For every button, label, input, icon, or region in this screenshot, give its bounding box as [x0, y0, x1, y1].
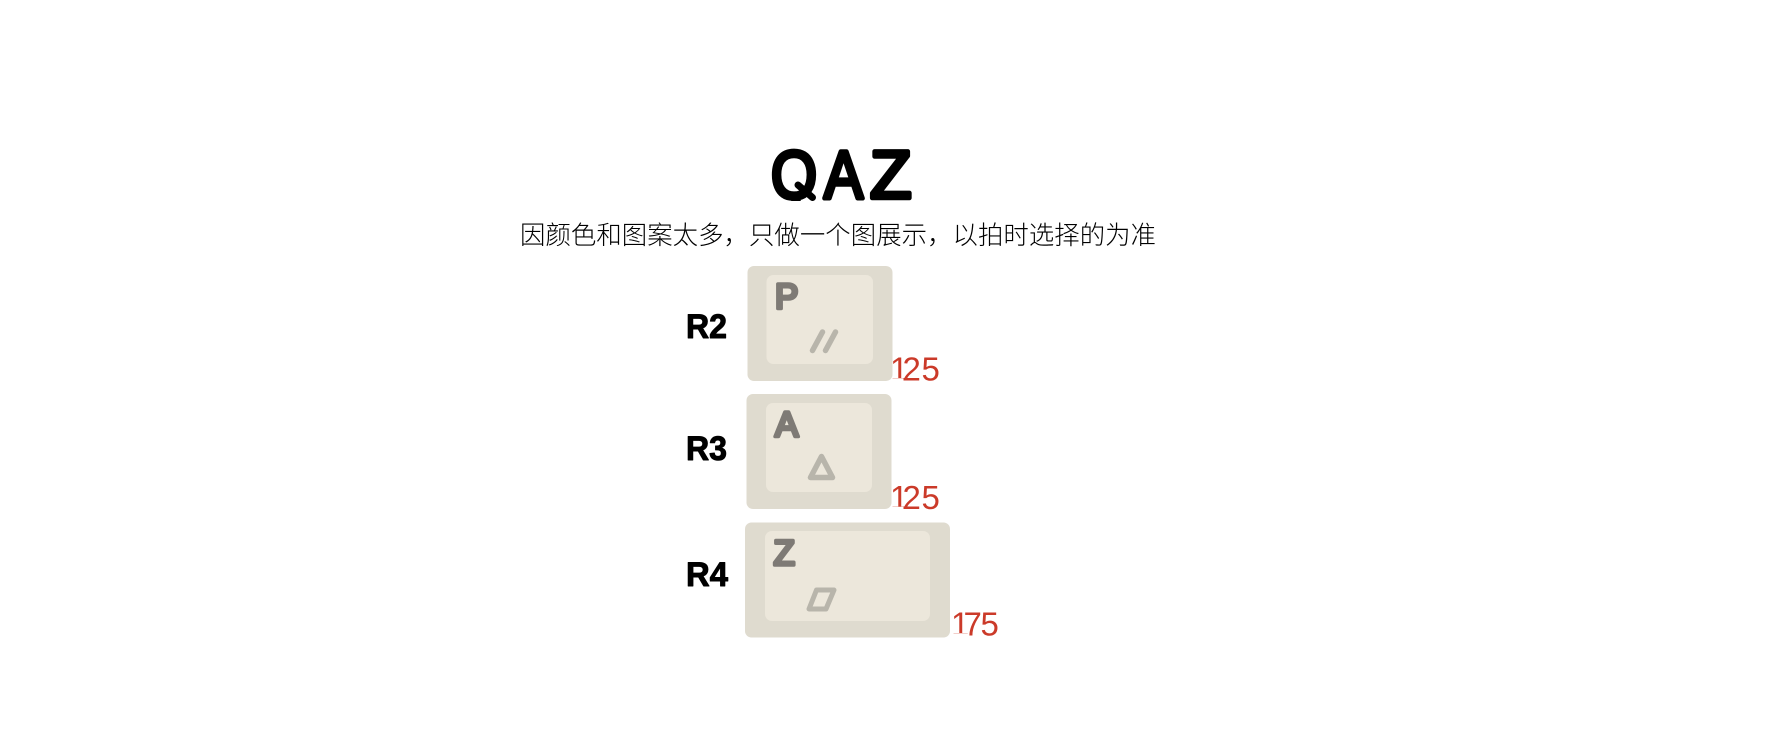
title [772, 148, 912, 201]
keycap A [746, 394, 892, 509]
legend letter P: P [775, 278, 798, 316]
legend letter Z: Z [774, 534, 795, 573]
infographic canvas [522, 148, 1155, 638]
size label 175: 175 [951, 606, 999, 642]
icon: triangle [810, 456, 832, 478]
keycap Z [745, 522, 950, 638]
title: Q [771, 136, 817, 213]
row label R4: R4 [686, 556, 728, 594]
legend letter A: A [775, 406, 799, 444]
title: Z [870, 137, 912, 213]
subtitle: 因颜色和图案太多，只做一个图展示，以拍时选择的为准 [520, 222, 1156, 250]
row label R2: R2 [686, 308, 727, 346]
size label 125: 125 [890, 479, 940, 516]
row label R3: R3 [686, 430, 727, 468]
title: A [824, 138, 864, 213]
size label 125: 125 [890, 350, 940, 388]
icon: double slash [812, 332, 836, 350]
keycap P [748, 266, 892, 381]
icon: parallelogram [809, 590, 834, 609]
